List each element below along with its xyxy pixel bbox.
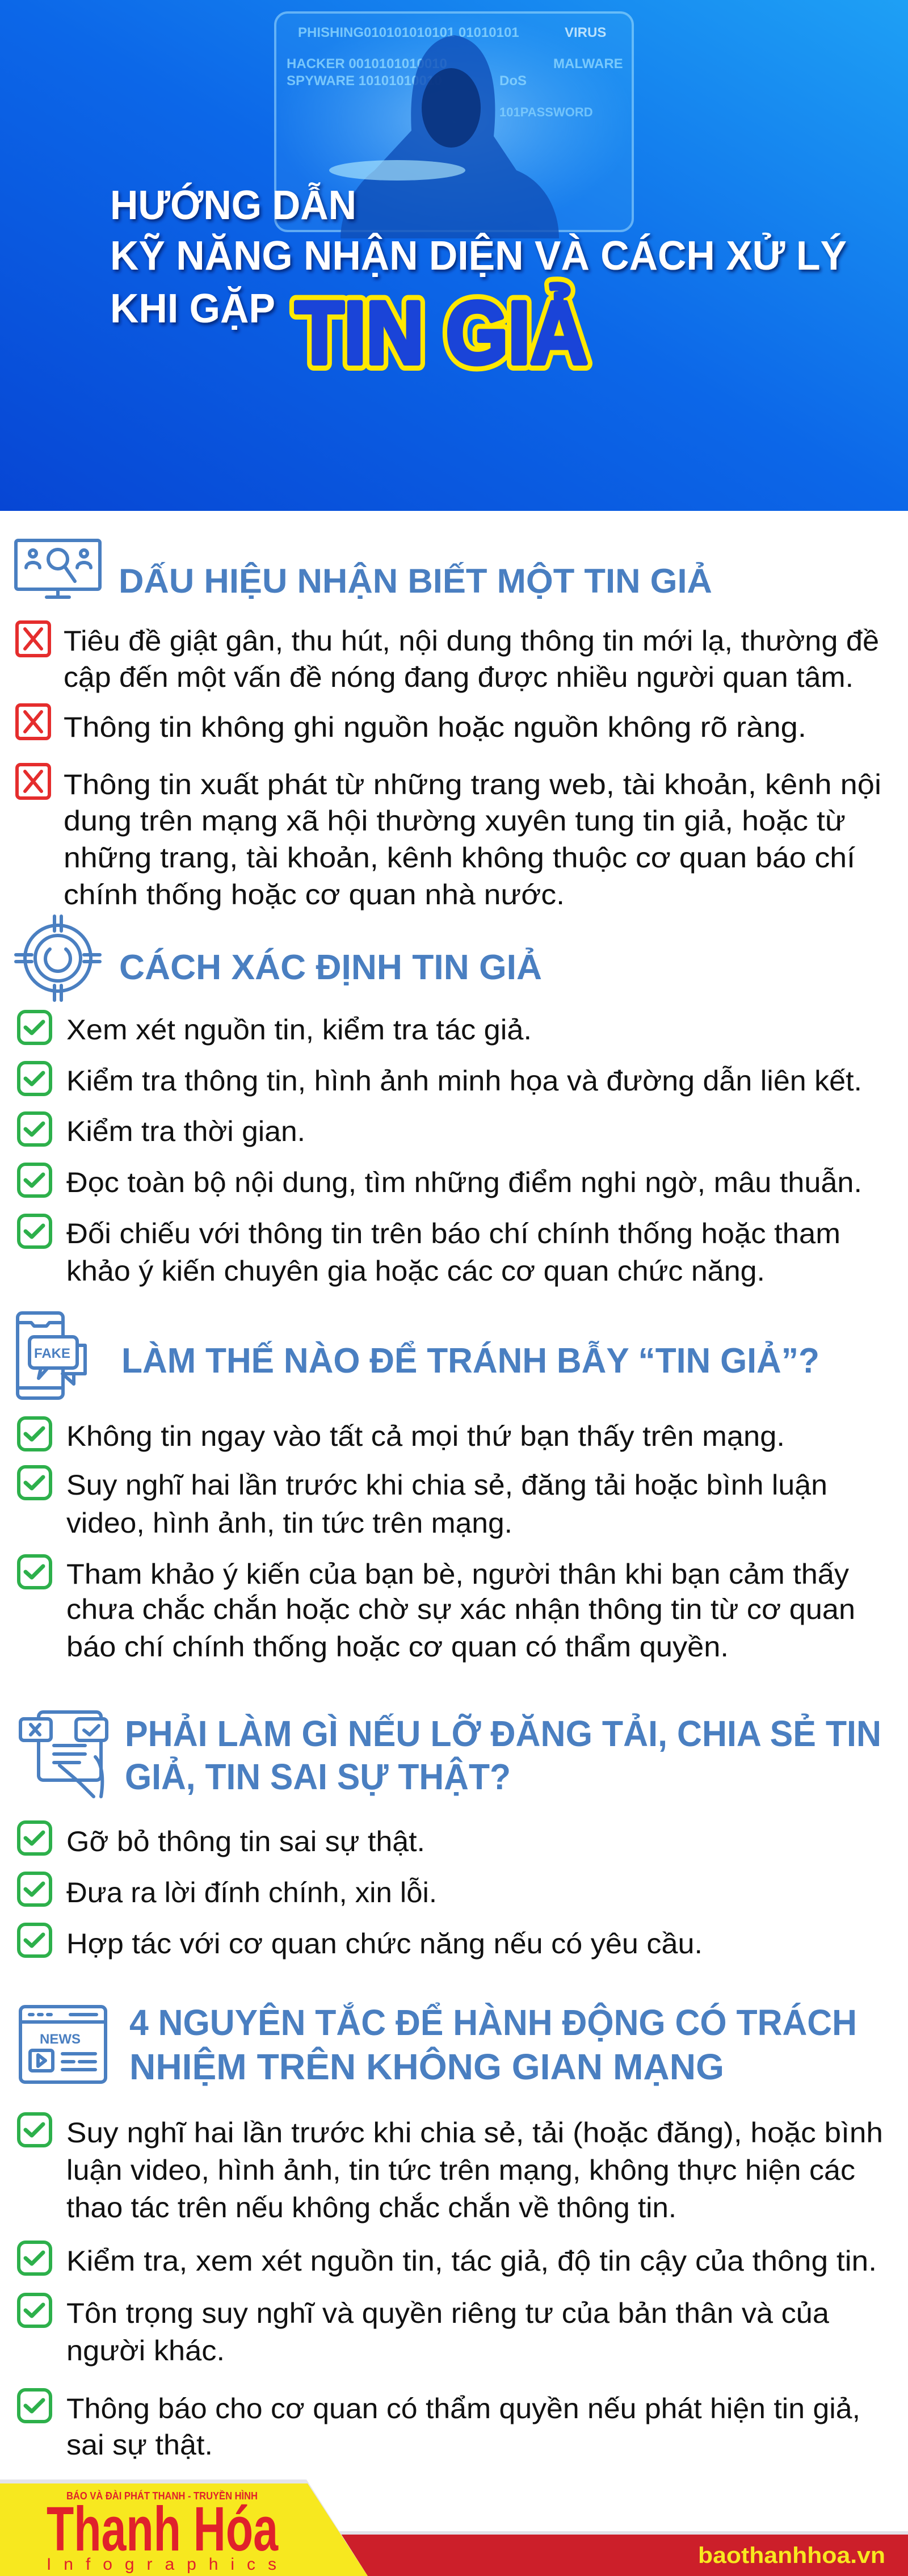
hooded figure: [329, 35, 559, 238]
checklist: [19, 2114, 883, 2461]
checklist: Tôn trọng suy nghĩ và quyền riêng tư của bản thân và của: [66, 2297, 829, 2329]
item 3: dung trên mạng xã hội thường xuyên tung tin giả, hoặc từ: [64, 805, 846, 837]
item 2: Thông tin không ghi nguồn hoặc nguồn không rõ ràng.: [64, 711, 806, 743]
checklist: Kiểm tra thời gian.: [66, 1115, 305, 1147]
panel: cách xác định tin giả: [16, 916, 862, 1287]
item 1: [17, 622, 879, 693]
logo block: BÁO VÀ ĐÀI PHÁT THANH - TRUYỀN HÌNH: [66, 2490, 258, 2502]
item 3: [17, 765, 881, 911]
hacker screen panel: MALWARE: [553, 56, 623, 72]
title highlight: TIN GIẢ: TIN GIẢ: [295, 284, 588, 383]
checklist: chưa chắc chắn hoặc chờ sự xác nhận thông tin từ cơ quan: [66, 1593, 855, 1625]
title: KỸ NĂNG NHẬN DIỆN VÀ CÁCH XỬ LÝ: [110, 233, 847, 279]
checklist: báo chí chính thống hoặc cơ quan có thẩm quyền.: [66, 1631, 729, 1663]
panel: 4 nguyên tắc: [19, 2002, 883, 2461]
item 3: những trang, tài khoản, kênh không thuộc cơ quan báo chí: [64, 842, 855, 874]
hacker screen panel: [275, 12, 633, 231]
icon: news browser: NEWS: [40, 2032, 81, 2047]
heading: DẤU HIỆU NHẬN BIẾT MỘT TIN GIẢ: [119, 562, 712, 600]
checklist: Hợp tác với cơ quan chức năng nếu có yêu cầu.: [66, 1928, 703, 1960]
checklist: Suy nghĩ hai lần trước khi chia sẻ, đăng tải hoặc bình luận: [66, 1469, 827, 1501]
checklist: luận video, hình ảnh, tin tức trên mạng, không thực hiện các: [66, 2154, 855, 2186]
heading: GIẢ, TIN SAI SỰ THẬT?: [125, 1756, 511, 1797]
checklist: Xem xét nguồn tin, kiểm tra tác giả.: [66, 1014, 532, 1046]
checklist: [19, 1822, 703, 1960]
checklist: Không tin ngay vào tất cả mọi thứ bạn thấy trên mạng.: [66, 1420, 785, 1452]
hacker screen panel: SPYWARE 10101010010: [287, 73, 442, 89]
heading: LÀM THẾ NÀO ĐỂ TRÁNH BẪY “TIN GIẢ”?: [121, 1341, 819, 1381]
item 3: chính thống hoặc cơ quan nhà nước.: [64, 879, 565, 911]
checklist: sai sự thật.: [66, 2429, 213, 2461]
icon: monitor with people: [16, 540, 100, 597]
heading: NHIỆM TRÊN KHÔNG GIAN MẠNG: [129, 2046, 724, 2087]
checklist: video, hình ảnh, tin tức trên mạng.: [66, 1507, 512, 1539]
checklist: [19, 1012, 862, 1287]
title: [110, 182, 847, 332]
heading: [129, 2002, 857, 2087]
logo block: Thanh Hóa: [47, 2494, 279, 2564]
title highlight: TIN GIẢ: TIN GIẢ: [295, 284, 588, 383]
checklist: Tham khảo ý kiến của bạn bè, người thân khi bạn cảm thấy: [66, 1558, 849, 1590]
hacker screen panel: DoS: [499, 73, 527, 89]
header banner: [0, 0, 908, 511]
panel: làm thế nào để tránh bẫy tin giả: [18, 1313, 855, 1663]
heading: 4 NGUYÊN TẮC ĐỂ HÀNH ĐỘNG CÓ TRÁCH: [129, 2002, 857, 2043]
heading: PHẢI LÀM GÌ NẾU LỠ ĐĂNG TẢI, CHIA SẺ TIN: [125, 1713, 881, 1754]
icon: tablet with hand: [20, 1712, 107, 1797]
checklist: người khác.: [66, 2335, 225, 2367]
logo block: [0, 2479, 368, 2576]
item 1: Tiêu đề giật gân, thu hút, nội dung thông tin mới lạ, thường đề: [64, 625, 879, 657]
checklist: Thông báo cho cơ quan có thẩm quyền nếu phát hiện tin giả,: [66, 2393, 860, 2424]
hacker screen panel: 101PASSWORD: [499, 105, 593, 119]
hacker screen panel: HACKER 0010101010010: [287, 56, 447, 72]
hacker screen panel: PHISHING010101010101 01010101: [298, 25, 519, 40]
checklist: thao tác trên nếu không chắc chắn về thông tin.: [66, 2192, 676, 2223]
icon: target: [16, 916, 100, 1000]
website: baothanhhoa.vn: [698, 2543, 885, 2568]
checklist: Suy nghĩ hai lần trước khi chia sẻ, tải (hoặc đăng), hoặc bình: [66, 2117, 883, 2149]
title: KHI GẶP: [110, 286, 275, 332]
checklist: Đọc toàn bộ nội dung, tìm những điểm nghi ngờ, mâu thuẫn.: [66, 1167, 862, 1198]
checklist: Kiểm tra thông tin, hình ảnh minh họa và đường dẫn liên kết.: [66, 1065, 862, 1097]
icon: phone with FAKE bubble: [18, 1313, 85, 1398]
icon: news browser: [20, 2007, 106, 2082]
heading: CÁCH XÁC ĐỊNH TIN GIẢ: [119, 948, 542, 987]
footer: [0, 2479, 908, 2576]
hacker screen panel: VIRUS: [565, 25, 606, 40]
checklist: Kiểm tra, xem xét nguồn tin, tác giả, độ tin cậy của thông tin.: [66, 2245, 877, 2277]
item 1: cập đến một vấn đề nóng đang được nhiều người quan tâm.: [64, 661, 854, 693]
heading: [125, 1713, 881, 1797]
icon: phone with FAKE bubble: FAKE: [34, 1346, 70, 1361]
logo block: Infographics: [47, 2555, 276, 2574]
checklist: [19, 1418, 855, 1663]
checklist: Đưa ra lời đính chính, xin lỗi.: [66, 1877, 437, 1908]
panel: dấu hiệu nhận biết: [16, 540, 881, 911]
checklist: khảo ý kiến chuyên gia hoặc các cơ quan chức năng.: [66, 1255, 765, 1287]
checklist: Gỡ bỏ thông tin sai sự thật.: [66, 1826, 425, 1857]
panel: phải làm gì nếu lỡ đăng tải: [19, 1712, 881, 1960]
title: HƯỚNG DẪN: [110, 182, 356, 228]
checklist: Đối chiếu với thông tin trên báo chí chính thống hoặc tham: [66, 1218, 840, 1249]
item 3: Thông tin xuất phát từ những trang web, tài khoản, kênh nội: [64, 769, 881, 800]
